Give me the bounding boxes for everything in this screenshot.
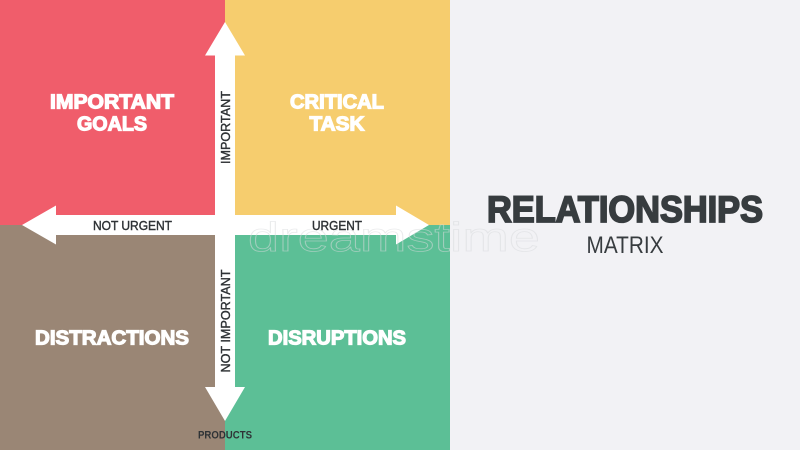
heading: important goals: IMPORTANT <box>50 92 174 114</box>
subtitle: matrix: MATRIX <box>586 232 664 259</box>
title: relationships: RELATIONSHIPS <box>487 189 763 230</box>
panel: disruptions <box>225 225 450 450</box>
heading: critical: CRITICAL <box>290 92 384 114</box>
panel: critical task <box>225 0 450 225</box>
arrows: four-way axis cross <box>22 22 429 421</box>
axis label: urgent: URGENT <box>312 219 362 233</box>
panel: important goals <box>0 0 225 225</box>
axis label: not urgent: NOT URGENT <box>93 219 172 233</box>
heading: disruptions: DISRUPTIONS <box>268 328 406 350</box>
heading: distractions: DISTRACTIONS <box>35 328 189 350</box>
axis label: not important: NOT IMPORTANT <box>219 269 233 372</box>
label: products: PRODUCTS <box>198 430 252 442</box>
right background panel <box>450 0 800 450</box>
watermark: dreamstime: dreamstime <box>248 214 540 260</box>
heading: task line: TASK <box>310 114 365 136</box>
heading: goals line: GOALS <box>77 114 147 136</box>
panel: distractions <box>0 225 225 450</box>
axis label: important: IMPORTANT <box>219 91 233 164</box>
